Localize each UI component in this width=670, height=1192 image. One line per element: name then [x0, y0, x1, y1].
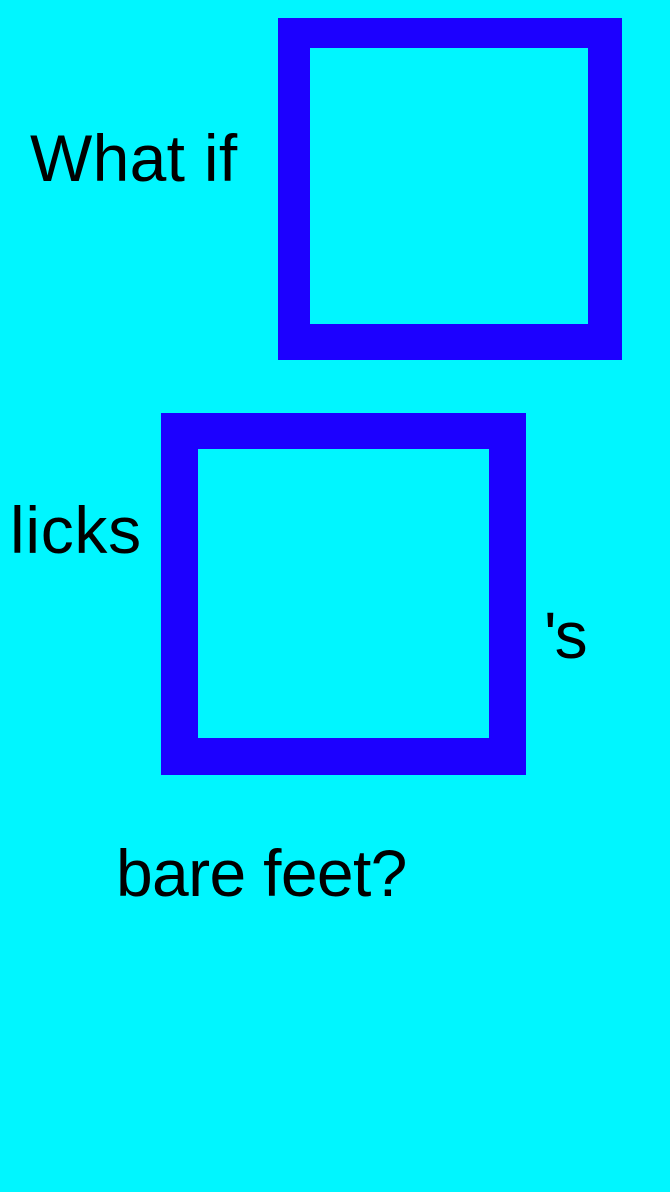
text: possessive s: 's	[544, 598, 586, 672]
blank box 2	[161, 413, 526, 775]
text: licks: licks	[10, 493, 142, 567]
text: bare feet?: bare feet?	[116, 836, 407, 910]
text: What if: What if	[30, 121, 237, 195]
blank box 1	[278, 18, 622, 360]
